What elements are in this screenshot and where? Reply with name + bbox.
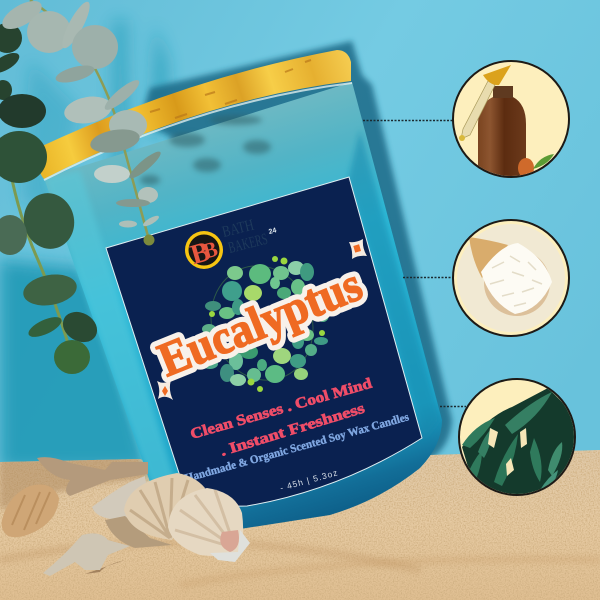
connector dotted lines	[363, 120, 466, 406]
brand name: BAKERS	[227, 231, 269, 257]
right scallop shell	[168, 488, 243, 556]
ingredient circle: essential oil	[453, 61, 569, 178]
tagline	[189, 375, 375, 460]
icon: almond and leaf	[518, 158, 534, 176]
brand name: 24	[268, 227, 277, 236]
brand name	[221, 212, 280, 257]
jar shadow on wall	[140, 41, 452, 462]
lid wood grain	[120, 60, 311, 130]
ingredient circle: soy wax	[453, 220, 569, 336]
descriptor line: Handmade & Organic Scented Soy Wax Candles	[184, 411, 411, 485]
leaf wreath	[195, 251, 329, 395]
sand ground	[0, 450, 600, 600]
frosted wax shadows	[140, 115, 271, 185]
icon: amber bottle	[478, 97, 526, 176]
weight and burn time: - 45h | 5.3oz	[279, 468, 338, 493]
ingredient circle: eucalyptus leaves	[459, 379, 580, 495]
product label	[106, 177, 422, 507]
palm leaf shadows	[0, 20, 170, 470]
wooden lid	[40, 50, 351, 179]
icon: wax flakes	[481, 243, 552, 314]
title: Eucalyptus: Eucalyptus	[151, 258, 369, 387]
candle jar	[40, 50, 442, 529]
title: Eucalyptus: Eucalyptus	[151, 258, 369, 387]
jar glass body	[44, 82, 442, 529]
left scallop shell	[124, 473, 205, 540]
corals and shells on sand	[2, 457, 250, 576]
brand logo: B	[200, 236, 221, 264]
brand name: BATH	[221, 217, 256, 241]
tagline: Clean Senses . Cool Mind	[189, 375, 375, 443]
brand logo: B	[187, 236, 214, 271]
tagline: . Instant Freshness	[218, 401, 367, 460]
brand logo	[185, 231, 223, 271]
coral pieces	[37, 457, 172, 576]
sparkle icons	[157, 239, 367, 400]
icon: wooden spoon	[469, 237, 508, 278]
silver eucalyptus branch	[0, 0, 164, 245]
dark eucalyptus branch	[0, 23, 103, 374]
icon: dropper	[461, 81, 495, 139]
sponge shell	[2, 484, 59, 537]
